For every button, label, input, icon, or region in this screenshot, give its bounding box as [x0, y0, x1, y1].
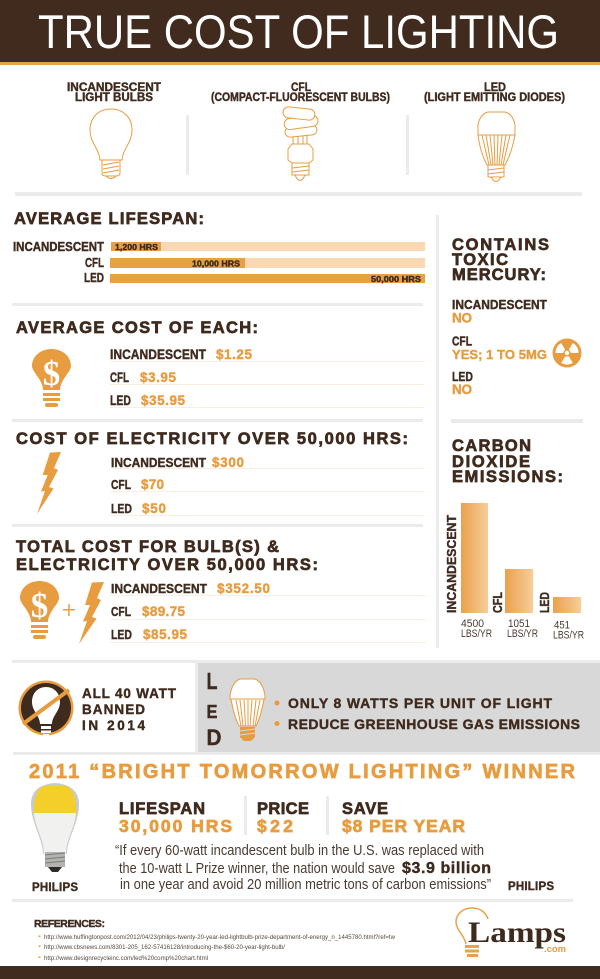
total rows: INCANDESCENT	[111, 581, 207, 596]
icon: lightning bolt	[37, 452, 61, 514]
panel: winner stats: 30,000 HRS	[119, 816, 232, 836]
logo: Lamps.com	[456, 908, 566, 957]
panel: carbon dioxide emissions: CARBON	[452, 437, 531, 455]
quote	[115, 842, 491, 893]
icon: LED bulb	[230, 679, 265, 741]
panel: 40 watt ban: BANNED	[82, 702, 145, 717]
panel: toxic mercury: MERCURY:	[452, 266, 546, 284]
references: http://www.huffingtonpost.com/2012/04/23/philips-twenty-20-year-led-lightbulb-prize-department-of-energy_n_1445780.html?ref=tw	[44, 934, 395, 941]
bulb type: CFL: CFL	[291, 82, 311, 94]
panel: toxic mercury: CONTAINS	[452, 236, 549, 254]
total rows: $85.95	[143, 627, 187, 642]
references: REFERENCES:	[34, 918, 105, 930]
panel: 40 watt ban: ALL 40 WATT	[82, 686, 177, 701]
cost rows: LED	[110, 393, 131, 408]
panel: toxic mercury: TOXIC	[452, 251, 508, 269]
electricity rows: LED	[111, 501, 132, 516]
panel: toxic mercury: NO	[452, 382, 472, 397]
electricity rows	[110, 455, 425, 516]
panel: toxic mercury	[452, 236, 582, 397]
cost rows: $3.95	[140, 370, 176, 385]
panel: winner stats: $8 PER YEAR	[342, 816, 465, 836]
references: http://www.designrecycleinc.com/led%20comp%20chart.html	[44, 955, 209, 962]
emissions bar chart	[444, 503, 584, 642]
icon: incandescent bulb	[90, 109, 132, 178]
panel: LED benefits: D	[206, 725, 222, 750]
panel: toxic mercury: NO	[452, 310, 472, 326]
emissions bar chart: 1051	[508, 618, 530, 630]
electricity rows: $50	[142, 501, 166, 516]
panel: average cost of each	[16, 319, 425, 408]
footer bar	[0, 966, 600, 979]
panel: winner stats: $22	[257, 816, 293, 836]
panel: total cost: ELECTRICITY OVER 50,000 HRS:	[16, 556, 318, 574]
total rows: LED	[111, 627, 132, 642]
bulb type: LED: (LIGHT EMITTING DIODES)	[424, 92, 565, 104]
panel: winner stats	[119, 796, 465, 836]
emissions bar chart: LBS/YR	[461, 628, 492, 640]
quote: in one year and avoid 20 million metric tons of carbon emissions”	[120, 876, 491, 893]
logo: Lamps.com: Lamps	[468, 916, 566, 949]
quote: $3.9 billion	[402, 860, 491, 877]
lifespan bar chart: CFL	[85, 256, 104, 270]
panel: 40 watt ban	[18, 680, 177, 736]
emissions bar chart: CFL	[490, 592, 505, 613]
panel: 40 watt ban: IN 2014	[82, 718, 145, 733]
icon: Philips bulb photo	[31, 783, 79, 872]
lifespan bar chart: 10,000 HRS	[192, 258, 240, 268]
cost rows: INCANDESCENT	[110, 347, 207, 362]
panel: cost of electricity: COST OF ELECTRICITY OVER 50,000 HRS:	[16, 430, 408, 448]
emissions bar chart: INCANDESCENT	[444, 515, 459, 613]
icon: CFL spiral bulb	[282, 106, 319, 180]
lifespan bar chart	[13, 240, 425, 285]
quote: the 10-watt L Prize winner, the nation would save	[119, 860, 395, 877]
cost rows: $1.25	[216, 347, 252, 362]
bulb type: CFL: (COMPACT-FLUORESCENT BULBS)	[211, 92, 390, 104]
panel: LED benefits: L	[206, 668, 218, 694]
bulb type: incandescent: INCANDESCENT	[67, 82, 161, 94]
lifespan bar chart: 1,200 HRS	[115, 242, 158, 252]
panel: LED benefits: ONLY 8 WATTS PER UNIT OF LIGHT	[288, 695, 552, 711]
icon: radiation	[552, 338, 582, 368]
lifespan bar chart: LED	[84, 271, 104, 285]
lifespan bar chart: INCANDESCENT	[13, 240, 104, 254]
cost rows: CFL	[110, 370, 129, 385]
panel: toxic mercury: CFL	[452, 334, 472, 348]
total rows: CFL	[111, 604, 131, 619]
electricity rows: $70	[141, 477, 164, 492]
heading: 2011 winner: 2011 “BRIGHT TOMORROW LIGHTING” WINNER	[29, 761, 576, 783]
cost rows: $35.95	[141, 393, 185, 408]
references: http://www.cbsnews.com/8301-205_162-57416128/introducing-the-$60-20-year-light-bulb/	[44, 944, 285, 951]
total rows: $352.50	[217, 581, 270, 596]
panel: average lifespan: AVERAGE LIFESPAN:	[14, 210, 204, 228]
references	[34, 918, 395, 962]
icon: banned bulb	[18, 680, 74, 736]
panel: average lifespan	[13, 210, 425, 285]
panel: toxic mercury: INCANDESCENT	[452, 297, 547, 312]
emissions bar chart: LBS/YR	[553, 630, 584, 642]
emissions bar chart: 4500	[461, 618, 484, 630]
lifespan bar chart: 50,000 HRS	[371, 274, 421, 284]
emissions bar chart: LED	[537, 592, 552, 613]
bulb type: incandescent: LIGHT BULBS	[75, 92, 153, 104]
quote: “If every 60-watt incandescent bulb in the U.S. was replaced with	[115, 842, 484, 859]
total rows: $89.75	[142, 604, 185, 619]
panel: carbon dioxide emissions	[444, 437, 584, 642]
bulb type: CFL	[211, 82, 390, 180]
panel: toxic mercury: YES; 1 TO 5MG	[452, 347, 547, 362]
header banner	[0, 0, 600, 65]
panel: winner stats: LIFESPAN	[119, 800, 205, 818]
icon: LED bulb	[478, 112, 515, 182]
dividers	[186, 115, 189, 175]
panel: winner stats: PRICE	[257, 800, 309, 818]
icon: dollar bulb	[32, 349, 71, 407]
panel: carbon dioxide emissions: DIOXIDE	[452, 453, 530, 471]
icon: dollar bulb plus lightning bolt: $	[31, 586, 48, 625]
panel: cost of electricity	[16, 430, 425, 516]
icon: dollar bulb plus lightning bolt	[20, 581, 104, 644]
panel: winner stats: SAVE	[342, 800, 388, 818]
panel: LED benefits	[195, 663, 600, 752]
panel: Philips bulb	[31, 783, 79, 894]
panel: average cost of each: AVERAGE COST OF EACH:	[16, 319, 258, 337]
electricity rows: $300	[212, 455, 244, 470]
panel: carbon dioxide emissions: EMISSIONS:	[452, 468, 563, 486]
quote attribution: PHILIPS	[508, 881, 554, 893]
logo: Lamps.com: .com	[544, 944, 566, 955]
bulb type: LED	[424, 82, 565, 182]
electricity rows: INCANDESCENT	[111, 455, 206, 470]
emissions bar chart: LBS/YR	[507, 628, 538, 640]
panel: total cost	[16, 538, 426, 644]
icon: dollar bulb: $	[43, 354, 60, 393]
panel: Philips bulb: PHILIPS	[32, 882, 78, 894]
panel: total cost: TOTAL COST FOR BULB(S) &	[16, 538, 279, 556]
panel: toxic mercury: LED	[452, 369, 473, 384]
bulb type: incandescent	[67, 82, 161, 178]
panel: LED benefits: E	[206, 702, 218, 722]
cost rows	[110, 347, 425, 408]
total rows	[110, 581, 426, 643]
electricity rows: CFL	[111, 477, 131, 492]
emissions bar chart: 451	[554, 620, 570, 632]
panel: LED benefits: REDUCE GREENHOUSE GAS EMISSIONS	[288, 716, 580, 732]
bulb type: LED: LED	[484, 82, 506, 94]
